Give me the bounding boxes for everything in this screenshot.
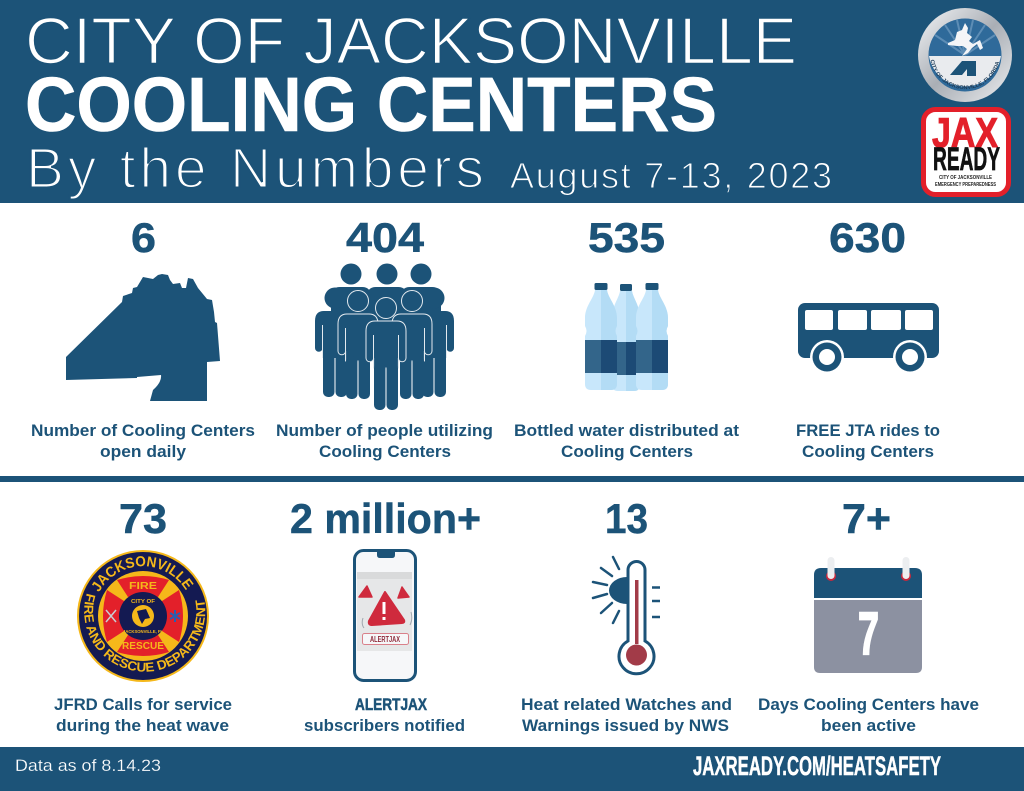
stat: JFRD calls: during the heat wave (56, 717, 229, 735)
stat: cooling centers count (31, 214, 255, 461)
icon: fire and rescue badge: FIRE (129, 580, 157, 592)
icon: city seal (918, 8, 1012, 102)
stat: ALERTJAX subscribers: ALERTJAX (355, 696, 427, 714)
stat: JTA rides (796, 214, 940, 461)
stat: bottled water: 535 (588, 214, 665, 261)
icon: fire and rescue badge: CITY OF (131, 599, 156, 605)
stat: people: Number of people utilizing (276, 422, 493, 440)
icon: Duval county map (66, 274, 220, 401)
icon: fire and rescue badge (77, 550, 209, 682)
stat: heat watches: Heat related Watches and (521, 696, 732, 714)
title line 1: CITY OF JACKSONVILLE (25, 4, 797, 78)
stat: heat watches (521, 495, 732, 735)
icon: fire and rescue badge: FIRE AND RESCUE DEPARTMENT (84, 594, 206, 672)
stat: JTA rides: Cooling Centers (802, 443, 934, 461)
icon: thermometer and sun (593, 557, 660, 674)
date range: August 7-13, 2023 (510, 155, 832, 196)
stat: bottled water: Bottled water distributed at (514, 422, 740, 440)
stat: ALERTJAX subscribers: 2 million+ (290, 495, 481, 542)
subtitle: By the Numbers (26, 136, 484, 200)
stat: JFRD calls (54, 495, 232, 735)
icon: phone with alert: ALERTJAX (370, 635, 400, 644)
stat: heat watches: 13 (605, 495, 648, 542)
stat: days active: 7+ (842, 495, 891, 542)
stat: JFRD calls: JFRD Calls for service (54, 696, 232, 714)
icon: fire and rescue badge: JACKSONVILLE (92, 556, 194, 592)
JAX wordmark: JAX (932, 109, 998, 156)
stat: cooling centers count: Number of Cooling Centers (31, 422, 255, 440)
stat: heat watches: Warnings issued by NWS (522, 717, 729, 735)
header banner (0, 0, 1024, 203)
stat: people (276, 214, 493, 461)
stat: ALERTJAX subscribers: subscribers notified (304, 717, 465, 735)
stat: people: 404 (346, 214, 425, 261)
logo caption (935, 175, 997, 188)
stat: people: Cooling Centers (319, 443, 451, 461)
icon: fire and rescue badge: JACKSONVILLE, FL (123, 629, 163, 634)
icon: JAX READY logo (924, 109, 1008, 194)
icon: calendar: 7 (858, 600, 879, 667)
data date: Data as of 8.14.23 (15, 756, 161, 775)
divider (0, 476, 1024, 482)
footer bar (0, 747, 1024, 791)
title line 2: COOLING CENTERS (25, 62, 717, 148)
stat: JFRD calls: 73 (119, 495, 167, 542)
logo caption: EMERGENCY PREPAREDNESS (935, 182, 997, 188)
stat: days active (758, 495, 979, 735)
icon: calendar (814, 557, 922, 673)
icon: bus (798, 303, 939, 374)
icon: group of people (315, 264, 454, 410)
stat: ALERTJAX subscribers (290, 495, 481, 735)
stat: bottled water: Cooling Centers (561, 443, 693, 461)
stat: cooling centers count: 6 (131, 214, 156, 261)
stat: days active: Days Cooling Centers have (758, 696, 979, 714)
icon: water bottles (585, 283, 668, 391)
icon: city seal: CITY OF JACKSONVILLE, FLORIDA (930, 60, 1000, 90)
stat: days active: been active (821, 717, 916, 735)
stat: JTA rides: 630 (829, 214, 906, 261)
icon: fire and rescue badge: RESCUE (122, 640, 164, 652)
stat: bottled water (514, 214, 740, 461)
logo caption: CITY OF JACKSONVILLE (939, 175, 993, 181)
stat: JTA rides: FREE JTA rides to (796, 422, 940, 440)
stat: cooling centers count: open daily (100, 443, 187, 461)
icon: phone with alert (354, 550, 416, 680)
